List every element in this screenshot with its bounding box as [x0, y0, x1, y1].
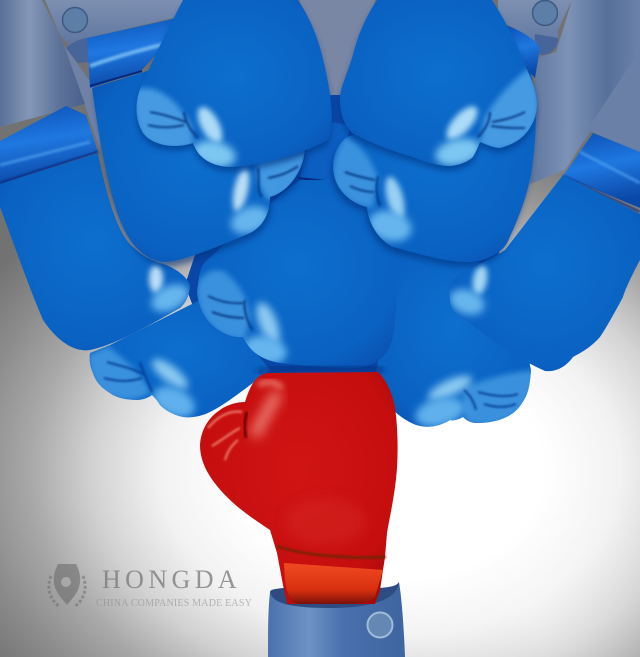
button [532, 0, 558, 26]
lower patch of red glove [284, 563, 383, 604]
blue glove: lower left [90, 301, 270, 418]
left suit sleeve [0, 0, 183, 150]
dark blue fill between gloves [150, 95, 520, 385]
blue glove: upper mid left with cuff [87, 18, 307, 267]
red glove [200, 372, 398, 604]
blue glove: top left [134, 0, 332, 172]
tagline: CHINA COMPANIES MADE EASY [96, 598, 252, 609]
contact shadow above red glove [256, 368, 384, 372]
blue glove: lower right [375, 245, 535, 432]
blue suit sleeve under red glove [268, 582, 405, 657]
right cuff and blue glove: mid right [446, 133, 640, 371]
watermark logo [49, 564, 252, 609]
left cuff and blue glove: mid left [0, 106, 193, 350]
button [62, 8, 88, 32]
blue glove: upper mid right [331, 25, 540, 267]
right suit sleeve [498, 0, 640, 184]
suit backdrop top centre [300, 0, 375, 130]
blue glove: centre [197, 178, 397, 368]
logo icon: pen nib in wreath [49, 564, 85, 607]
cuff [87, 18, 177, 88]
brand name: HONGDA [102, 565, 241, 594]
blue glove neck behind centre [300, 120, 350, 185]
blue glove: top right [340, 0, 539, 171]
sleeve button [368, 612, 392, 638]
